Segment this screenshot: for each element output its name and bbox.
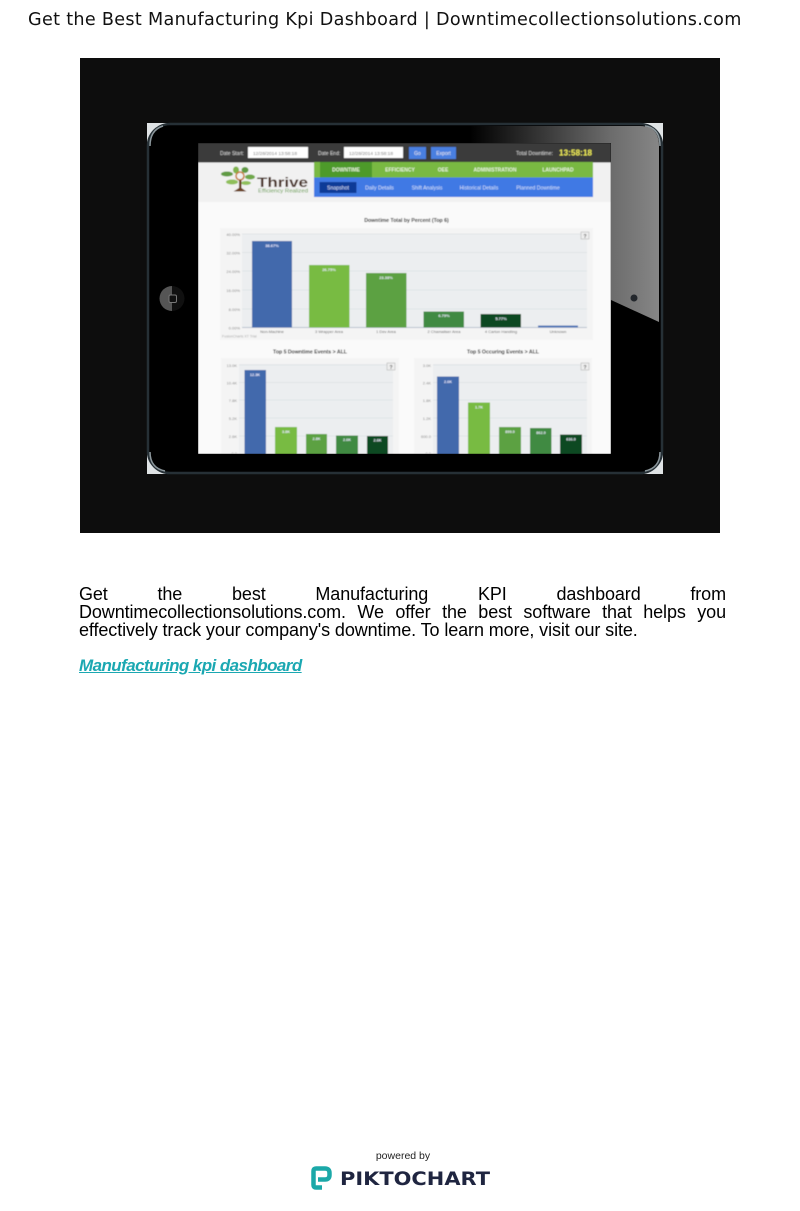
nav bars	[314, 162, 593, 197]
bar chart: top 5 occurring events: 2.4K	[423, 380, 431, 386]
top bar: Go	[414, 151, 421, 157]
title: Get the Best Manufacturing Kpi Dashboard | Downtimecollectionsolutions.com	[28, 10, 742, 30]
bar chart: top 5 occurring events: 3.0K	[423, 363, 431, 368]
bar chart: downtime total by percent: 3 Wrapper Area	[315, 329, 344, 334]
bar chart: top 5 occurring events: Top 5 Occuring Events > ALL	[467, 350, 540, 356]
top bar: Date End:	[318, 151, 340, 157]
nav bars: DOWNTIME	[332, 168, 361, 174]
Piktochart branding	[311, 1150, 490, 1190]
bar chart: top 5 downtime events: 0.0	[231, 451, 238, 456]
bar chart: top 5 downtime events: 2.6K	[229, 434, 237, 439]
bar chart: downtime total by percent: 0.00%	[229, 326, 240, 330]
Thrive logo: Thrive	[257, 174, 308, 190]
nav bars: Snapshot	[327, 186, 350, 192]
bar chart: downtime total by percent: FusionCharts XT Trial	[222, 334, 257, 338]
hero image: tablet showing dashboard	[80, 58, 720, 533]
Thrive logo	[221, 166, 308, 194]
bar chart: downtime total by percent: 40.00%	[226, 232, 240, 237]
nav bars: EFFICIENCY	[385, 168, 416, 174]
bar chart: downtime total by percent: 32.00%	[226, 250, 240, 256]
bar chart: top 5 occurring events: 899.0	[505, 430, 515, 434]
icon: Piktochart P	[314, 1168, 330, 1188]
nav bars: Planned Downtime	[516, 186, 560, 192]
Thrive logo: Efficiency Realized	[258, 188, 308, 194]
bar chart: downtime total by percent: ?	[583, 234, 587, 240]
bar chart: downtime total by percent	[220, 218, 593, 340]
top bar: Export	[436, 151, 451, 157]
bar chart: downtime total by percent: Unknown	[550, 329, 566, 334]
bar chart: downtime total by percent: 26.75%	[322, 267, 336, 272]
nav bars: OEE	[438, 168, 449, 174]
bar chart: top 5 occurring events: 600.0	[421, 434, 432, 439]
corner gloss	[150, 126, 660, 471]
bar chart: downtime total by percent: 38.67%	[265, 243, 279, 248]
bar chart: top 5 downtime events: 2.6K	[373, 438, 382, 442]
bar chart: top 5 downtime events: 12.3K	[250, 373, 260, 377]
bar chart: top 5 occurring events: 0.0	[425, 451, 432, 456]
bar chart: downtime total by percent: 24.00%	[226, 269, 240, 274]
bar chart: top 5 occurring events	[414, 350, 592, 456]
bar chart: downtime total by percent: 2 Chamaliser Area	[428, 329, 461, 334]
top bar: 12/28/2014 13:58:18	[253, 151, 297, 157]
bar chart: top 5 downtime events: ?	[389, 365, 393, 371]
nav bars: Shift Analysis	[412, 186, 443, 192]
bar chart: top 5 occurring events: 636.0	[566, 438, 576, 442]
nav bars: ADMINISTRATION	[474, 168, 517, 174]
top bar: Date Start:	[220, 151, 244, 157]
bar chart: top 5 downtime events: Top 5 Downtime Events > ALL	[273, 350, 348, 356]
camera	[630, 294, 638, 302]
bar chart: top 5 downtime events: 2.6K	[343, 438, 351, 442]
bar chart: downtime total by percent: Downtime Total by Percent (Top 6)	[364, 218, 449, 224]
bar chart: top 5 downtime events: 10.4K	[227, 380, 237, 386]
nav bars: Daily Details	[365, 186, 394, 192]
screen glare	[611, 126, 659, 322]
bar chart: downtime total by percent: 6.79%	[438, 313, 450, 318]
top bar: Total Downtime:	[516, 151, 553, 157]
bar chart: downtime total by percent: 8.00%	[229, 307, 240, 312]
bar chart: top 5 downtime events: 2.8K	[312, 437, 321, 441]
bar chart: top 5 occurring events: 1.2K	[423, 416, 431, 421]
top bar: 13:58:18	[559, 148, 593, 158]
bar chart: top 5 downtime events: 5.2K	[229, 416, 237, 421]
top bar: 12/28/2014 13:58:18	[349, 151, 393, 157]
wordmark: PIKTOCHART	[340, 1169, 490, 1190]
bar chart: downtime total by percent: 1 Dev Area	[376, 329, 397, 334]
nav bars: LAUNCHPAD	[542, 168, 574, 174]
tablet	[147, 123, 663, 474]
bar chart: downtime total by percent: 23.38%	[379, 275, 393, 280]
home button	[159, 286, 184, 311]
bar chart: top 5 downtime events: 7.8K	[229, 398, 237, 403]
dashboard screen	[198, 143, 611, 456]
bar chart: top 5 occurring events: 2.6K	[444, 380, 452, 384]
bar chart: downtime total by percent: Non-Machine	[260, 329, 285, 334]
bar chart: downtime total by percent: 5.77%	[495, 316, 507, 321]
bar chart: top 5 downtime events: 13.0K	[227, 363, 237, 368]
bar chart: top 5 occurring events: 862.0	[536, 431, 546, 435]
Piktochart branding: powered by	[376, 1150, 431, 1162]
bar chart: top 5 downtime events	[221, 350, 399, 456]
bar chart: top 5 occurring events: 1.8K	[423, 398, 431, 403]
top bezel glare	[470, 126, 611, 143]
bar chart: top 5 occurring events: ?	[583, 365, 587, 371]
bar chart: downtime total by percent: 4 Carton Handling	[485, 329, 517, 334]
description text: Get the best Manufacturing KPI dashboard from Downtimecollectionsolutions.com. We offer the best software that helps you effectively track your company's downtime. To learn more, visit our site.	[79, 584, 726, 640]
link: Manufacturing kpi dashboard	[79, 656, 302, 675]
nav bars: Historical Details	[460, 186, 499, 192]
bar chart: downtime total by percent: 16.00%	[226, 288, 240, 293]
bar chart: top 5 downtime events: 3.8K	[282, 430, 290, 434]
bar chart: top 5 occurring events: 1.7K	[475, 406, 483, 410]
top bar	[198, 143, 611, 162]
